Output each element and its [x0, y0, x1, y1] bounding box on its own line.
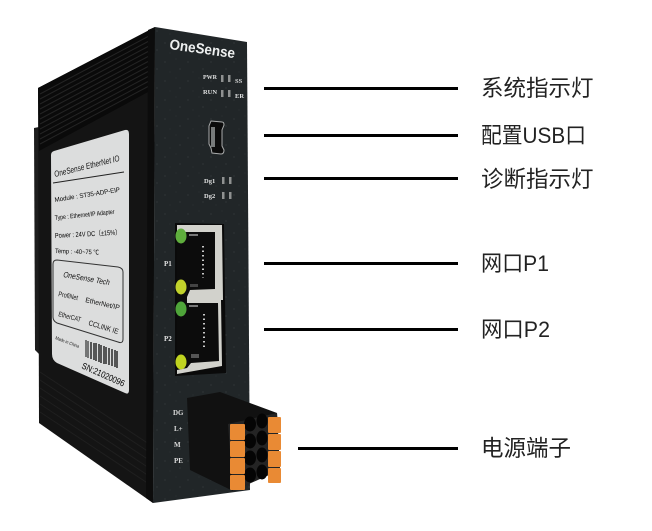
system indicator LEDs: ER [235, 93, 244, 100]
callout: system indicators [264, 76, 594, 101]
label title: OneSense EtherNet IO [53, 153, 121, 179]
label specifications: Power : 24V DC（±15%） [55, 229, 121, 240]
device photo: OneSense module [34, 27, 281, 503]
power terminal pin labels: PE [174, 457, 183, 465]
label protocol box: CCLINK IE [87, 318, 120, 336]
orange terminal levers [230, 417, 281, 490]
label specifications [54, 187, 121, 257]
label protocol box: ProfiNet [58, 291, 79, 302]
callout: USB config port [264, 123, 586, 148]
terminal holes [244, 414, 268, 482]
Ethernet ports P1 and P2: P2 [164, 335, 172, 343]
brand logo: OneSense [168, 37, 236, 62]
system indicator LEDs: RUN [203, 89, 217, 96]
label protocol box: EtherCAT [57, 311, 82, 324]
serial number: SN:21020096 [80, 361, 126, 389]
made in china: Made in China [55, 335, 80, 349]
port gap [177, 295, 187, 304]
power terminal pin labels [173, 409, 184, 465]
power terminal pin labels: M [174, 441, 181, 449]
port pins [203, 246, 204, 348]
label specifications: Module : ST35-ADP-EIP [54, 187, 121, 204]
callout: network port P1: 网口P1 [481, 251, 549, 276]
product label sticker [51, 130, 129, 394]
diagnostic indicator LEDs [204, 177, 232, 200]
callout: network port P1 [264, 251, 549, 276]
left side of housing [34, 27, 155, 503]
label protocol box: EtherNet/IP [85, 297, 121, 312]
callout: system indicators: 系统指示灯 [481, 76, 594, 101]
port 1 cavity [177, 232, 215, 297]
callout: network port P2 [264, 317, 550, 342]
callout: diagnostic indicators [264, 167, 594, 192]
barcode [86, 340, 117, 368]
system indicator LEDs: PWR [203, 74, 217, 81]
port 2 cavity [177, 303, 219, 370]
diagnostic indicator LEDs: Dg2 [204, 193, 215, 200]
white port frame [177, 225, 223, 374]
diagnostic indicator LEDs: Dg1 [204, 178, 215, 185]
label protocol box [53, 260, 123, 343]
callout: power terminal: 电源端子 [481, 436, 571, 461]
Ethernet ports P1 and P2 [164, 223, 226, 376]
power terminal pin labels: DG [173, 409, 184, 417]
green and yellow LEDs [176, 228, 186, 244]
power terminal pin labels: L+ [174, 425, 183, 433]
label protocol box: OneSense Tech [63, 270, 111, 287]
port labels: P1 [164, 260, 172, 268]
callout: diagnostic indicators: 诊断指示灯 [481, 167, 594, 192]
system indicator LEDs: SS [235, 78, 243, 85]
power terminal connector [187, 392, 281, 491]
front face of housing [153, 27, 250, 503]
system indicator LEDs [203, 74, 244, 100]
callout: network port P2: 网口P2 [481, 317, 550, 342]
USB port [209, 121, 224, 154]
callout: USB config port: 配置USB口 [481, 123, 586, 148]
label specifications: Type : Ethernet/IP Adapter [54, 209, 116, 222]
label specifications: Temp : -40~75 ℃ [55, 247, 100, 257]
callout: power terminal [298, 436, 571, 461]
port tab detail [189, 234, 198, 236]
